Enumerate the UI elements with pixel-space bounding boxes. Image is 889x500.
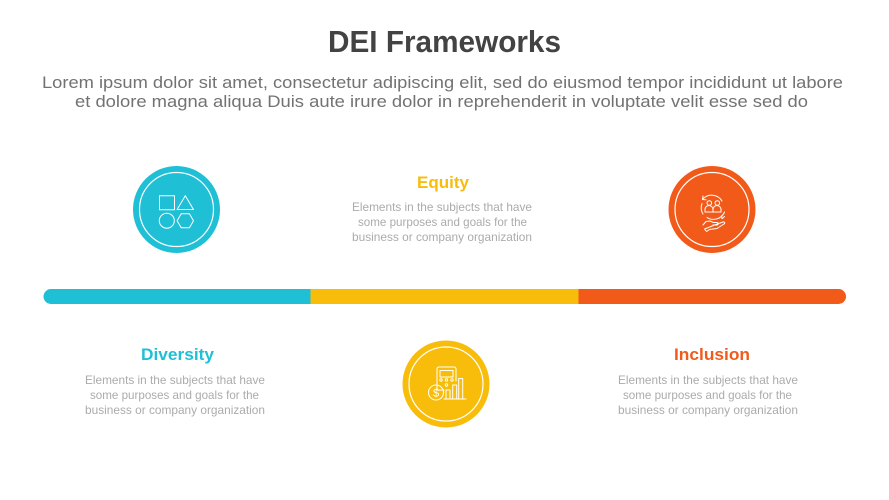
- icon: calculator, coin and bars: $: [433, 388, 439, 400]
- panel: equity text: [352, 173, 532, 244]
- subtitle text block: [42, 73, 843, 111]
- heading: equity: Equity: [417, 173, 470, 192]
- body: equity: some purposes and goals for the: [358, 215, 527, 229]
- body: diversity: [85, 373, 265, 417]
- panel: diversity text: [85, 345, 265, 417]
- body: equity: Elements in the subjects that have: [352, 200, 532, 214]
- subtitle text block: Lorem ipsum dolor sit amet, consectetur adipiscing elit, sed do eiusmod tempor incididunt ut labore: [42, 73, 843, 92]
- heading: inclusion: Inclusion: [674, 345, 750, 364]
- panel: diversity icon: [133, 166, 220, 253]
- body: diversity: Elements in the subjects that have: [85, 373, 265, 387]
- panel: equity icon: [402, 340, 490, 428]
- body: inclusion: Elements in the subjects that have: [618, 373, 798, 387]
- icon: shapes: [159, 196, 194, 228]
- body: equity: business or company organization: [352, 230, 532, 244]
- heading: diversity: Diversity: [141, 345, 215, 364]
- subtitle text block: et dolore magna aliqua Duis aute irure dolor in reprehenderit in voluptate velit esse sed do: [75, 92, 808, 111]
- body: inclusion: [618, 373, 798, 417]
- body: equity: [352, 200, 532, 244]
- title: DEI Frameworks: [328, 24, 561, 59]
- body: inclusion: business or company organization: [618, 403, 798, 417]
- timeline bar: [44, 289, 846, 304]
- body: diversity: business or company organization: [85, 403, 265, 417]
- body: inclusion: some purposes and goals for the: [623, 388, 792, 402]
- panel: inclusion text: [618, 345, 798, 417]
- body: diversity: some purposes and goals for the: [90, 388, 259, 402]
- panel: inclusion icon: [668, 166, 756, 253]
- icon: people and hand: [701, 195, 725, 232]
